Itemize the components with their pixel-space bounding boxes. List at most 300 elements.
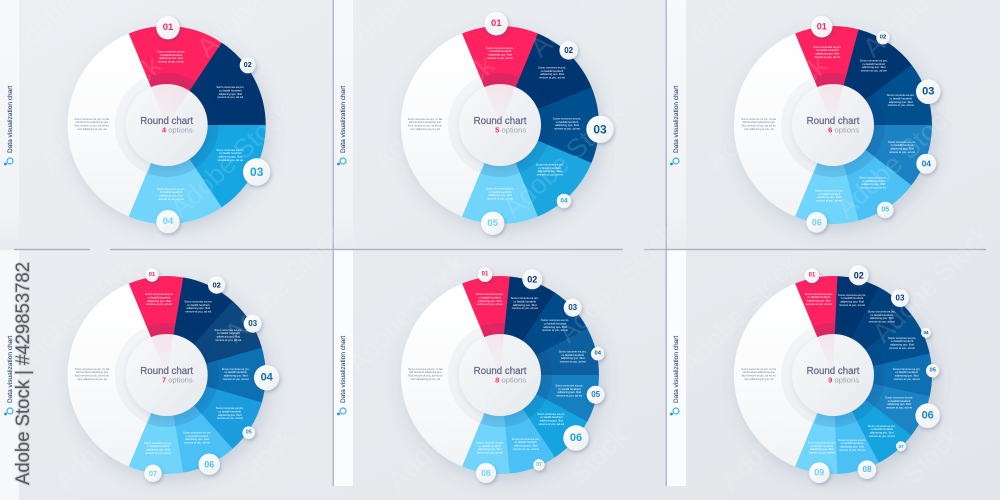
sector texts: adipiscing quo. Illud [478,299,502,303]
sector texts: cu fastidii hendrerit [541,69,564,73]
sector texts: adipiscing quo. Illud [887,402,911,406]
sector texts: nemore at you, ad est [539,75,565,79]
sector texts: adipiscing quo. Illud [540,72,564,76]
sector texts: Sumo nonumes ea pro, [216,85,245,89]
sector texts: nemore at you, ad est [861,68,887,72]
sector texts: nemore at you, ad est [487,196,513,200]
sector texts: nemore at you, ad est [146,302,172,306]
number badges: 01 [809,273,816,279]
sector texts: nemore at you, ad est [217,95,244,99]
sector texts: nemore at you, ad est [477,302,503,306]
number badges: 05 [929,368,937,374]
sector texts [741,45,916,203]
sector texts: Sumo nonumes ea pro, [216,406,244,410]
sector texts: cu fastidii hendrerit [807,295,830,299]
center disc: Round chart [474,366,527,377]
stock id stamp: Adobe Stock | #429853782 [13,262,34,485]
sector texts: tidii hendrerit adipiscing quo [76,120,108,124]
sector texts: cu fastidii hendrerit [147,444,170,448]
panel: 9 options [670,265,940,483]
sector texts: adipiscing quo. Illud [146,448,170,452]
sector texts: adipiscing quo. Illud [557,390,582,394]
number badges [805,265,940,483]
side label: Data visualization chart [7,336,14,403]
sector texts: adipiscing quo. Illud [488,193,512,197]
watermarks: Adobe Stock [675,249,805,378]
sector texts: Sumo nonumes ea pro, [813,45,842,49]
sector texts: nemore at you, ad est [806,302,832,306]
sector texts: cu fastidii hendrerit [224,370,247,374]
sector texts: tidii hendrerit adipiscing quo [409,370,442,374]
sector texts: nemore at you, ad est [814,55,841,59]
watermarks: Adobe Stock [35,50,167,177]
sector texts: Sumo nonumes ea pro, [214,328,243,332]
sector texts: nemore at you, ad est [185,310,212,314]
sector texts: nemore at you, ad est [512,306,538,310]
chart [401,34,565,216]
sector texts: cu fastidii hendrerit [538,166,561,170]
sectors [401,34,565,216]
sectors [401,284,569,466]
sector texts: Sumo nonumes ea pro, [815,189,843,193]
sector texts: tidii hendrerit adipiscing quo [743,370,775,374]
sector texts: nemore at you, ad est [158,197,184,201]
sector texts: Sumo nonumes ea pro, cu fas [74,117,110,121]
sector texts: cu fastidii hendrerit [561,353,584,357]
sector texts: cu fastidii hendrerit [870,427,893,431]
side label: Data visualization chart [340,336,347,403]
center disc [792,334,874,416]
sector texts: Sumo nonumes ea pro, [887,93,915,97]
chart [68,34,235,216]
sector texts: cu fastidii hendrerit [558,387,581,391]
number badges: 02 [244,62,252,69]
sector texts: cu fastidii hendrerit [513,299,536,303]
sector texts: nemore at you, ad est [158,60,184,64]
watermarks: Stock [231,421,300,490]
sector texts: adipiscing quo. Illud [870,430,894,434]
side label [337,86,347,165]
center disc [126,334,208,416]
sector texts: cu fastidii hendrerit [544,321,567,325]
sector texts: Sumo nonumes ea pro, [157,187,185,191]
sector texts: adipiscing quo. Illud [216,334,241,338]
number badges: 06 [570,432,582,444]
sector texts: nemore at you, ad est [215,338,242,342]
sector texts: adipiscing quo. Illud [514,444,538,448]
sector texts [74,50,245,201]
number badges: 03 [568,303,578,312]
number badges: 08 [481,468,491,478]
number badges: 02 [213,280,221,290]
number badges: 04 [560,198,568,204]
sector texts: cu fastidii hendrerit [187,303,210,307]
panel: 5 options [337,12,614,235]
sector texts: adipiscing quo. Illud [861,182,886,186]
sector texts: nemore at you, ad est [556,394,583,398]
number badges: 06 [812,217,822,227]
side label: Data visualization chart [673,336,680,403]
center disc: 9 options [828,376,859,385]
sector texts: nemore at you, ad est [217,416,243,420]
sector texts: cu fastidii hendrerit [841,441,864,445]
chart [68,284,237,466]
watermarks: Adobe Stock [9,249,139,378]
sector texts: nemore at you, ad est [816,198,842,202]
number badges: 01 [149,272,156,278]
sector texts: cu fastidii hendrerit [160,53,183,57]
sectors [68,284,237,466]
sector texts [408,46,581,201]
center disc: Round chart [807,116,860,127]
sector texts: cu fastidii hendrerit [841,296,864,300]
sector texts: cu fastidii hendrerit [148,295,171,299]
number badges [156,16,270,233]
sector texts: nemore at you, ad est [889,346,915,350]
side label [4,86,14,165]
sector texts: adipiscing quo. Illud [840,300,864,304]
sector texts: cu fastidii hendrerit [556,120,579,124]
side label: Data visualization chart [340,86,347,153]
sector texts: adipiscing quo. Illud [488,52,512,56]
sector texts: nemore at you, ad est [145,451,171,455]
watermarks: Adobe Stock [701,50,833,177]
ring [799,91,867,159]
number badges: 03 [922,86,934,98]
sector texts: adipiscing quo. Illud [159,194,183,198]
sector texts: Sumo nonumes ea pro, [476,441,504,445]
sector texts: cu fastidii hendrerit [489,190,512,194]
number badges: 07 [536,462,542,468]
sector texts: Sumo nonumes ea pro, [537,412,566,416]
sector texts: nemore at you, ad est [869,434,895,438]
sector texts: adipiscing quo. Illud [895,374,919,378]
center disc: 8 options [495,376,526,385]
side label: Data visualization chart [7,86,14,153]
watermarks: Adobe Stock [219,219,349,348]
number badges: 02 [527,274,537,284]
ring [466,341,534,409]
sector texts: cu fastidii hendrerit [219,151,242,155]
sector texts: adipiscing quo. Illud [513,303,537,307]
side label [670,86,680,165]
sector texts: nemore at you, ad est [894,377,920,381]
panel: 6 options [670,16,941,233]
sector texts: Sumo nonumes ea pro, [145,292,173,296]
center disc: Round chart [807,366,860,377]
sector texts: Sumo nonumes ea pro, [888,336,916,340]
sector texts: Sumo nonumes ea pro, cu fas [75,367,110,371]
sector texts: Sumo nonumes ea pro, [144,441,172,445]
watermarks: Adobe Stock [867,219,997,348]
sector texts: adipiscing quo. Illud [561,356,585,360]
sector texts: Sumo nonumes ea pro, [859,176,888,180]
sector texts: nemore at you, ad est [542,328,568,332]
sector texts: Sumo nonumes ea pro, [512,437,540,441]
sector texts: cu fastidii hendrerit [810,444,833,448]
sector texts: nemore at you, ad est [560,360,586,364]
chart [734,34,902,216]
ring [133,91,201,159]
sector texts: Sumo nonumes ea pro, [885,396,913,400]
sector texts: Sumo nonumes ea pro, [476,292,504,296]
number badges: 02 [564,46,574,55]
number badges [806,16,941,233]
sector texts: nam adipiscing at you, ad [410,127,440,131]
sector texts: Illud nemore at you, ad est eu [408,124,443,128]
watermarks: Adobe Stock [165,97,297,224]
chart [734,284,902,466]
sector texts: cu fastidii hendrerit [816,48,839,52]
center disc: Round chart [140,366,193,377]
sector texts: Sumo nonumes ea pro, [893,367,921,371]
number badges: 02 [854,270,864,280]
sector texts: cu fastidii hendrerit [540,415,563,419]
panel: 7 options [4,268,279,482]
sector texts: Sumo nonumes ea pro, [184,300,213,304]
watermarks: Adobe Stock [552,219,682,348]
sector texts: Sumo nonumes ea pro, [536,163,564,167]
watermarks: Adobe Stock [715,367,845,496]
sector texts: nam adipiscing at you, ad [77,377,107,381]
number badges: 05 [881,206,889,214]
sector texts: cu fastidii hendrerit [489,49,512,53]
sector texts: adipiscing quo. Illud [890,342,914,346]
sector texts: Sumo nonumes ea pro, [808,441,836,445]
number badges: 03 [896,294,905,302]
sector texts: adipiscing quo. Illud [478,447,502,451]
center disc [126,84,208,166]
number badges [481,12,614,235]
sector texts: nemore at you, ad est [477,451,503,455]
sector texts: Sumo nonumes ea pro, [183,431,211,435]
sector texts: nemore at you, ad est [888,103,914,107]
sector texts: Sumo nonumes ea pro, [216,148,245,152]
sector texts: adipiscing quo. Illud [870,316,894,320]
side label [670,336,680,415]
watermarks: Adobe Stock [831,97,963,224]
sector texts: Illud nemore at you, ad est eu [75,374,110,378]
sector texts: nemore at you, ad est [869,320,895,324]
chart [401,284,569,466]
sector texts: Illud nemore at you, ad est eu [408,374,443,378]
sector texts: Sumo nonumes ea pro, [838,438,866,442]
watermarks: Adobe Stock [368,50,500,177]
sector texts: cu fastidii hendrerit [891,143,914,147]
sector texts: cu fastidii hendrerit [895,370,918,374]
watermarks: Adobe Stock [382,367,512,496]
sector texts: nemore at you, ad est [839,448,865,452]
sector texts: cu fastidii hendrerit [891,339,914,343]
sector texts: adipiscing quo. Illud [185,437,209,441]
sector texts [75,292,250,455]
sector texts: nemore at you, ad est [839,303,865,307]
sector texts [408,292,587,454]
number badges: 04 [594,351,602,357]
sector texts: nemore at you, ad est [809,451,835,455]
number badges: 07 [149,469,157,478]
ring [799,341,867,409]
sector texts: nemore at you, ad est [184,441,210,445]
watermarks: Adobe Stock [342,249,472,378]
panel: 8 options [337,267,605,483]
watermarks: Stock [897,421,966,490]
sector texts [741,292,921,454]
sector texts: adipiscing quo. Illud [218,154,243,158]
sector texts: Sumo nonumes ea pro, [157,50,185,54]
number badges: 04 [923,330,929,335]
ring [466,91,534,159]
sector texts: tidii hendrerit adipiscing quo [76,370,109,374]
sector texts: nemore at you, ad est [223,377,249,381]
sector texts: tidii hendrerit adipiscing quo [743,120,775,124]
sector texts: adipiscing quo. Illud [810,447,834,451]
sector texts: Sumo nonumes ea pro, cu fas [741,367,777,371]
sector texts: nam adipiscing at you, ad [77,127,107,131]
center disc: 4 options [162,126,193,135]
number badges: 03 [250,165,264,179]
sector texts: Sumo nonumes ea pro, [511,296,539,300]
sector texts: nam adipiscing at you, ad [411,377,441,381]
sector texts: adipiscing quo. Illud [807,298,831,302]
sector texts: nemore at you, ad est [538,422,565,426]
sector texts: nam adipiscing at you, ad [744,127,774,131]
sector texts: tidii hendrerit adipiscing quo [409,120,442,124]
panel: 4 options [4,16,270,233]
sector texts: adipiscing quo. Illud [862,65,886,69]
center disc [792,84,874,166]
sector texts: nemore at you, ad est [889,150,915,154]
sector texts: Sumo nonumes ea pro, [553,117,581,121]
number badges: 04 [261,372,274,384]
number badges: 01 [163,22,174,33]
sector texts: cu fastidii hendrerit [870,313,893,317]
sector texts: Illud nemore at you, ad est eu [75,124,109,128]
sector texts: cu fastidii hendrerit [186,434,209,438]
sector texts: adipiscing quo. Illud [889,100,913,104]
sector texts: adipiscing quo. Illud [186,306,211,310]
number badges [144,268,279,482]
sector texts: Sumo nonumes ea pro, [860,59,888,63]
sector texts: adipiscing quo. Illud [543,325,567,329]
sector texts: Sumo nonumes ea pro, [838,293,866,297]
number badges: 06 [922,410,934,422]
sector texts: adipiscing quo. Illud [817,195,841,199]
sector texts: Sumo nonumes ea pro, [486,46,514,50]
number badges: 01 [817,22,827,32]
watermarks: Adobe Stock [49,367,179,496]
sector texts: nam adipiscing at you, ad [744,377,774,381]
sector texts: cu fastidii hendrerit [218,409,241,413]
number badges: 02 [880,35,886,41]
sector texts: cu fastidii hendrerit [160,190,183,194]
sector texts: cu fastidii hendrerit [217,331,240,335]
center disc: Round chart [474,116,527,127]
number badges: 03 [593,122,607,136]
sector texts: nemore at you, ad est [487,56,513,60]
sector texts: adipiscing quo. Illud [218,413,242,417]
sector texts: cu fastidii hendrerit [478,295,501,299]
side label: Data visualization chart [673,86,680,153]
sector texts: nemore at you, ad est [537,172,563,176]
sector texts: adipiscing quo. Illud [538,169,562,173]
sectors [734,284,902,466]
center disc: 5 options [495,126,526,135]
center disc: 6 options [828,126,859,135]
sector texts: adipiscing quo. Illud [840,444,864,448]
center disc: 7 options [162,376,193,385]
center disc [459,84,541,166]
watermarks: Adobe Stock [498,97,630,224]
number badges: 06 [204,459,214,469]
number badges: 09 [814,468,824,478]
sector texts: nemore at you, ad est [513,447,539,451]
sector texts: adipiscing quo. Illud [815,52,840,56]
sector texts: cu fastidii hendrerit [478,444,501,448]
sector texts: Sumo nonumes ea pro, [538,66,566,70]
sector texts: Sumo nonumes ea pro, [486,187,514,191]
sector texts: adipiscing quo. Illud [539,418,564,422]
sector texts: Sumo nonumes ea pro, [559,350,587,354]
sector texts: adipiscing quo. Illud [159,56,183,60]
number badges: 05 [487,218,499,229]
number badges: 05 [591,390,601,399]
sector texts: cu fastidii hendrerit [219,89,242,93]
sector texts: nemore at you, ad est [554,126,580,130]
sector texts: cu fastidii hendrerit [889,97,912,101]
sector texts: nemore at you, ad est [217,158,244,162]
side label [337,336,347,415]
sector texts: nemore at you, ad est [860,185,887,189]
ring [133,341,201,409]
side label [4,336,14,415]
sector texts: cu fastidii hendrerit [514,440,537,444]
center disc [459,334,541,416]
sector texts: Sumo nonumes ea pro, [222,367,250,371]
number badges: 04 [163,216,174,227]
number badges: 07 [898,444,904,449]
sector texts: Sumo nonumes ea pro, cu fas [741,117,777,121]
sector texts: adipiscing quo. Illud [147,299,171,303]
sector texts: Sumo nonumes ea pro, cu fas [408,367,443,371]
sector texts: adipiscing quo. Illud [555,123,579,127]
sector texts: cu fastidii hendrerit [862,62,885,66]
sector texts: Sumo nonumes ea pro, [868,424,896,428]
sector texts: Sumo nonumes ea pro, [541,318,569,322]
sector texts: cu fastidii hendrerit [818,192,841,196]
sector texts: Sumo nonumes ea pro, cu fas [408,117,443,121]
sector texts: Sumo nonumes ea pro, [888,140,916,144]
sector texts: Illud nemore at you, ad est eu [742,374,776,378]
number badges [476,267,605,483]
sector texts: cu fastidii hendrerit [862,179,885,183]
sector texts: adipiscing quo. Illud [218,92,243,96]
sector texts: Sumo nonumes ea pro, [868,310,896,314]
number badges: 01 [482,272,489,278]
sector texts: adipiscing quo. Illud [890,146,914,150]
center disc: Round chart [140,116,193,127]
sector texts: Sumo nonumes ea pro, [805,292,833,296]
number badges: 04 [922,159,931,169]
sector texts: Sumo nonumes ea pro, [555,384,584,388]
sector texts: nemore at you, ad est [886,406,912,410]
sectors [734,34,902,216]
number badges: 05 [246,430,252,436]
sector texts: cu fastidii hendrerit [888,399,911,403]
sectors [68,34,235,216]
number badges: 08 [863,465,872,474]
number badges: 01 [491,18,502,29]
